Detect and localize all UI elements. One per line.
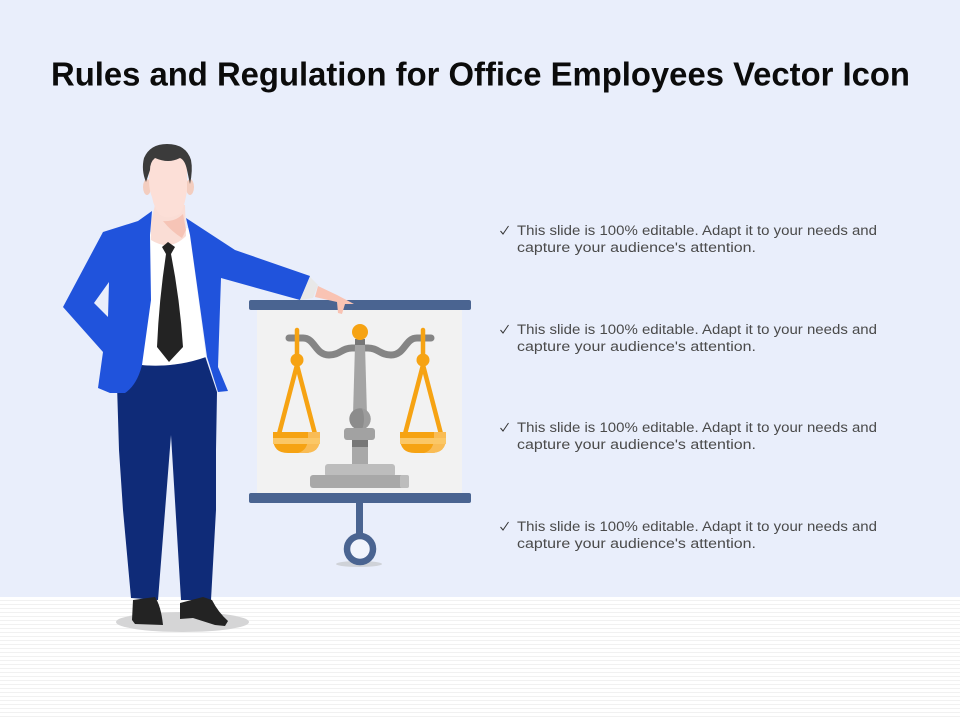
- bottom bar: [249, 493, 471, 503]
- bullet 1: This slide is 100% editable. Adapt it to your needs and: [517, 223, 877, 238]
- bullet 4: This slide is 100% editable. Adapt it to your needs and: [517, 519, 877, 534]
- bullet 3: [500, 420, 877, 452]
- right shoe: [180, 597, 228, 626]
- column ball: [349, 408, 371, 430]
- left shoe: [132, 597, 163, 625]
- face: [149, 152, 187, 217]
- trousers: [117, 356, 217, 600]
- bullet 4: capture your audience's attention.: [517, 536, 756, 551]
- bullet 1: [500, 223, 877, 255]
- column collar: [344, 428, 375, 440]
- stand ring: [347, 536, 373, 562]
- bullet 3: This slide is 100% editable. Adapt it to your needs and: [517, 420, 877, 435]
- floor shadow: [116, 612, 249, 632]
- title: Rules and Regulation for Office Employees Vector Icon: [51, 56, 910, 92]
- bullet 2: This slide is 100% editable. Adapt it to your needs and: [517, 322, 877, 337]
- bullet 4: [500, 519, 877, 551]
- floor: [0, 597, 960, 720]
- bullet 2: [500, 322, 877, 354]
- bullet 1: capture your audience's attention.: [517, 240, 756, 255]
- necktie: [157, 242, 183, 362]
- upper base: [325, 464, 395, 477]
- bullet 2: capture your audience's attention.: [517, 339, 756, 354]
- hair: [143, 144, 192, 184]
- icon: balance scale: [273, 324, 446, 488]
- column ball highlight: [362, 408, 371, 430]
- bullet 3: capture your audience's attention.: [517, 437, 756, 452]
- jacket right and arm: [186, 218, 310, 392]
- figure: businessman: [63, 144, 318, 632]
- neck shadow: [163, 214, 186, 238]
- knob: [352, 324, 368, 340]
- lower base highlight: [400, 475, 409, 488]
- beam: [289, 338, 431, 355]
- ears: [143, 179, 151, 195]
- lower base: [310, 475, 409, 488]
- stand shadow: [336, 561, 382, 567]
- column: [353, 345, 367, 415]
- board screen: [257, 310, 462, 493]
- left pan: [273, 330, 320, 453]
- shirt: [142, 228, 206, 366]
- hand on board: [315, 286, 354, 314]
- jacket left: [63, 211, 152, 393]
- top bar: [249, 300, 471, 310]
- lower stem: [352, 440, 368, 465]
- right pan: [400, 330, 446, 453]
- neck: [151, 205, 186, 245]
- stand pole: [356, 500, 363, 536]
- presentation board: [249, 300, 471, 567]
- shirt cuff: [300, 277, 318, 300]
